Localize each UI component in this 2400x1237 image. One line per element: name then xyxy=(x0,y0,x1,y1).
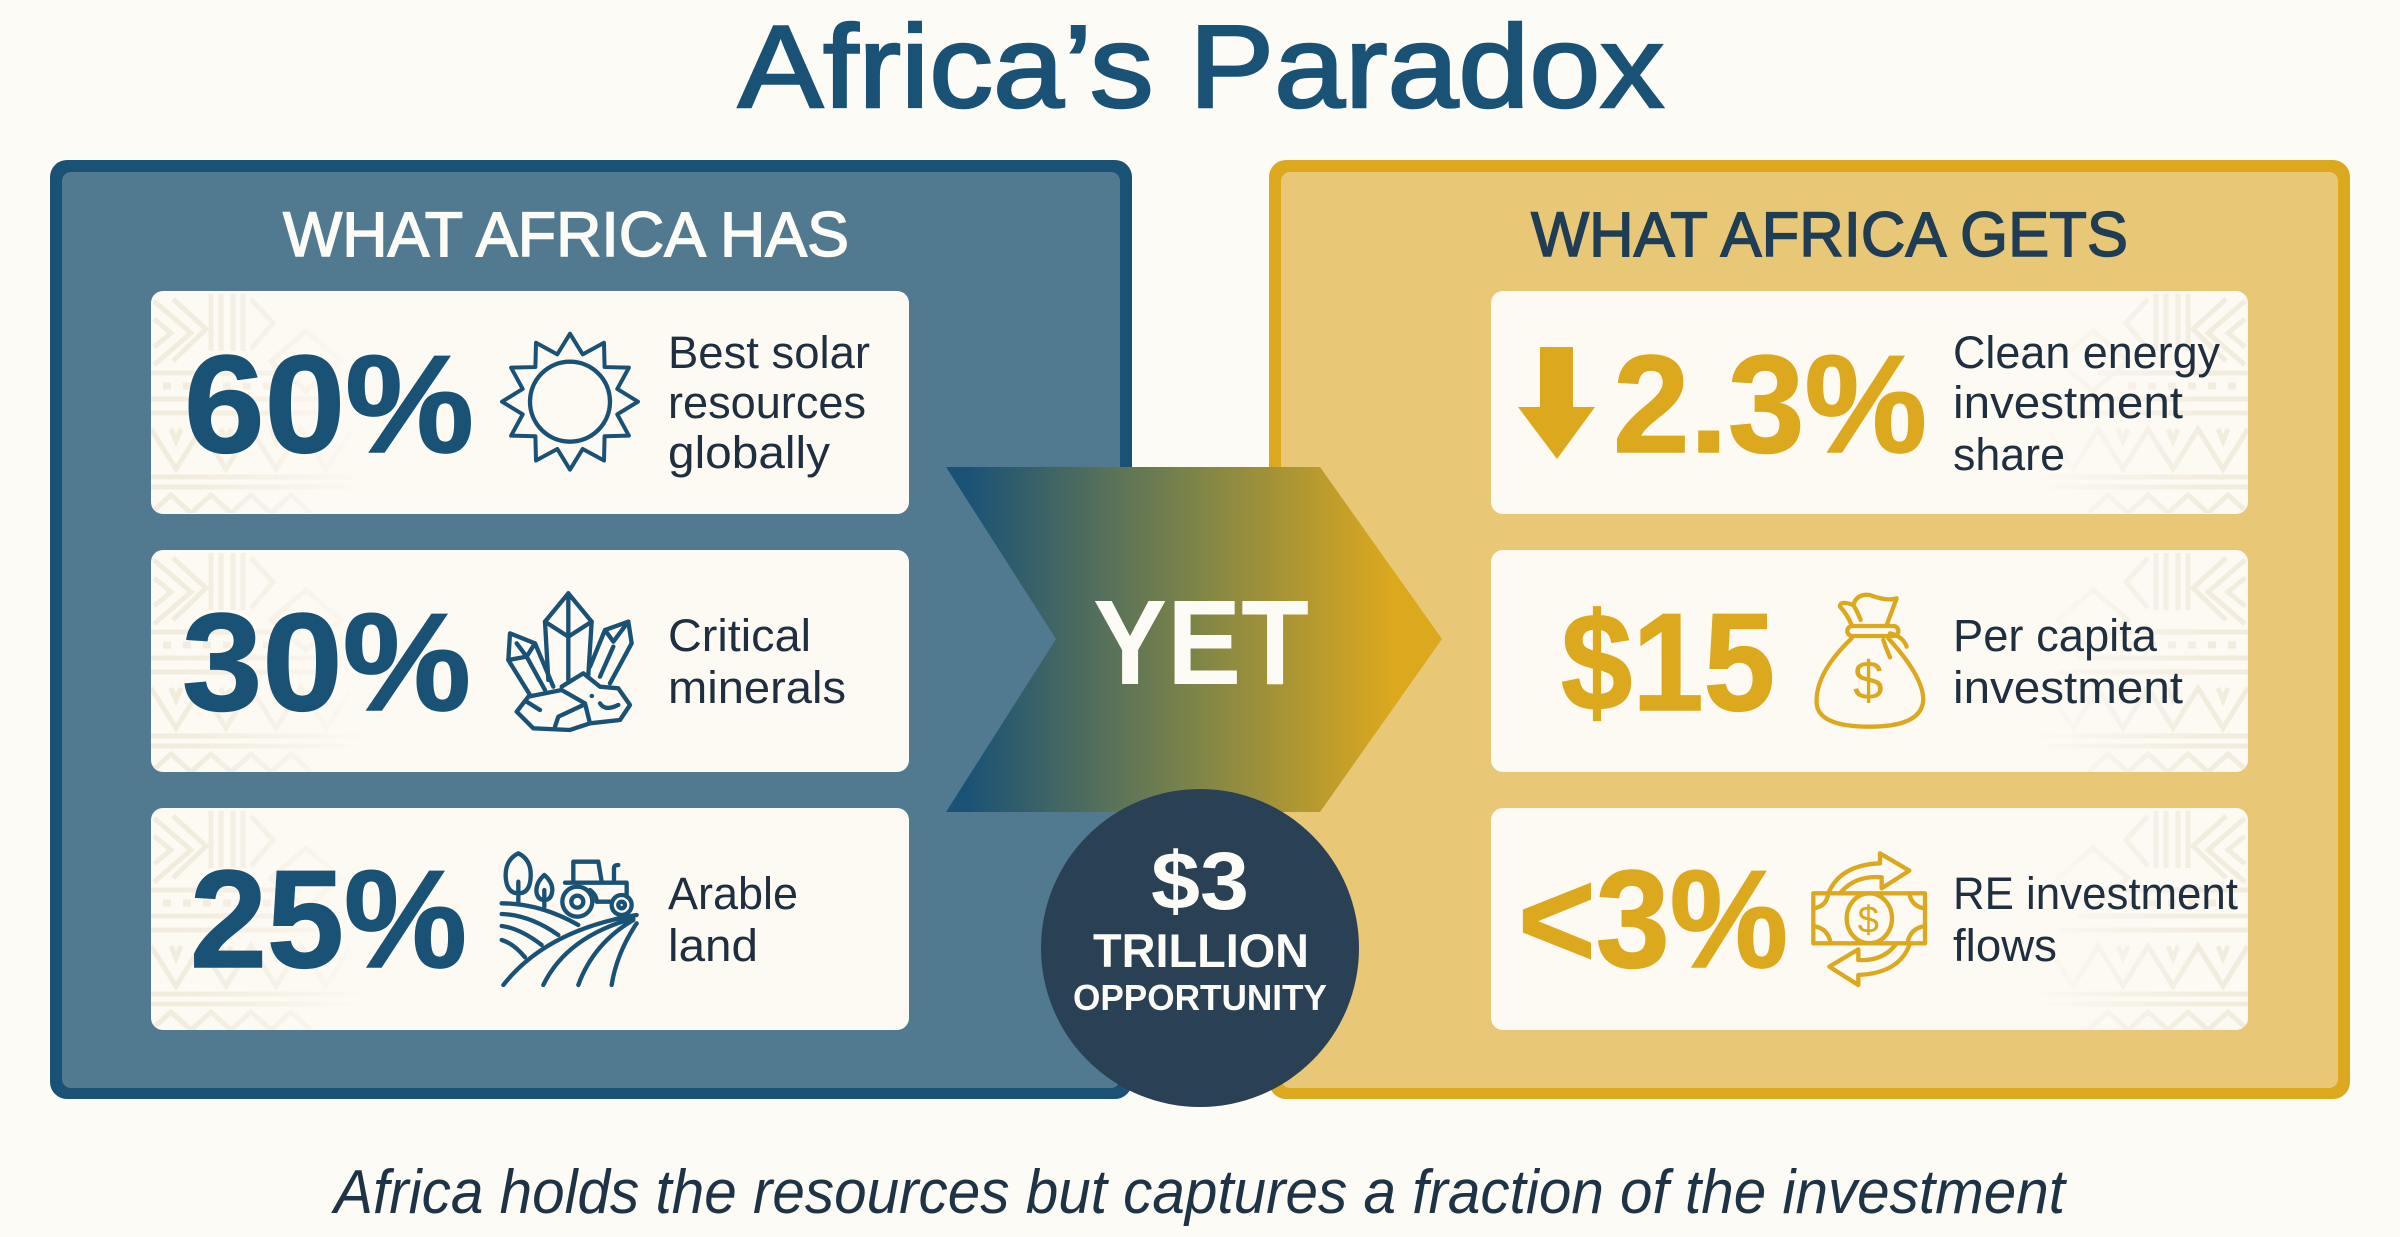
stat: 60%: 60% xyxy=(184,327,474,482)
stat: 25%: 25% xyxy=(190,842,467,997)
arrow: yet: YET xyxy=(1093,574,1309,710)
panel: what Africa gets xyxy=(1269,160,2350,1099)
label: clean energy investment share: investment xyxy=(1953,377,2184,428)
icon: cash flow arrows: $ xyxy=(1858,899,1879,942)
label: clean energy investment share: Clean energy xyxy=(1953,327,2220,378)
label: best solar resources globally: globally xyxy=(668,427,831,478)
card: 30% minerals xyxy=(151,550,909,772)
arrow: yet xyxy=(946,467,1442,812)
label: per capita investment: investment xyxy=(1953,662,2184,713)
icon: sun xyxy=(502,334,638,470)
label: critical minerals: minerals xyxy=(668,662,846,713)
label: arable land xyxy=(668,868,798,971)
heading: what Africa has: WHAT AFRICA HAS xyxy=(283,200,849,270)
label: critical minerals xyxy=(668,610,846,713)
icon: down arrow xyxy=(1518,347,1595,459)
icon: farm and tractor xyxy=(502,853,637,985)
label: per capita investment: Per capita xyxy=(1953,610,2158,661)
label: arable land: land xyxy=(668,920,758,971)
label: best solar resources globally: Best solar xyxy=(668,327,870,378)
icon: money bag xyxy=(1817,595,1923,727)
stat: <3%: <3% xyxy=(1518,842,1788,997)
label: clean energy investment share xyxy=(1953,327,2220,480)
icon: crystals xyxy=(508,593,632,730)
label: clean energy investment share: share xyxy=(1953,429,2065,480)
label: critical minerals: Critical xyxy=(668,610,811,661)
heading: what Africa gets: WHAT AFRICA GETS xyxy=(1531,200,2128,270)
callout: $3 trillion opportunity: OPPORTUNITY xyxy=(1073,977,1327,1018)
label: RE investment flows xyxy=(1953,868,2238,971)
label: best solar resources globally xyxy=(668,327,870,478)
card: $15 per capita xyxy=(1491,550,2248,772)
card: 25% arable land xyxy=(151,808,909,1030)
label: best solar resources globally: resources xyxy=(668,377,866,428)
stat: $15: $15 xyxy=(1561,585,1775,740)
caption: Africa holds the resources but captures a fraction of the investment xyxy=(330,1158,2068,1227)
callout: $3 trillion opportunity: $3 xyxy=(1151,836,1249,927)
icon: money bag: $ xyxy=(1853,649,1884,711)
card: 60% solar xyxy=(151,291,909,514)
icon: cash flow arrows xyxy=(1813,853,1925,985)
card: <3% RE flows xyxy=(1491,808,2248,1030)
stat: 2.3%: 2.3% xyxy=(1613,327,1927,482)
callout: $3 trillion opportunity: TRILLION xyxy=(1093,924,1309,977)
label: per capita investment xyxy=(1953,610,2184,713)
card: 2.3% clean energy xyxy=(1491,291,2248,514)
panel: what Africa has xyxy=(50,160,1132,1099)
callout: $3 trillion opportunity xyxy=(1041,789,1359,1107)
title: Africa’s Paradox xyxy=(738,1,1664,132)
stat: 30%: 30% xyxy=(182,585,471,740)
label: RE investment flows: flows xyxy=(1953,920,2057,971)
label: RE investment flows: RE investment xyxy=(1953,868,2238,919)
label: arable land: Arable xyxy=(668,868,798,919)
